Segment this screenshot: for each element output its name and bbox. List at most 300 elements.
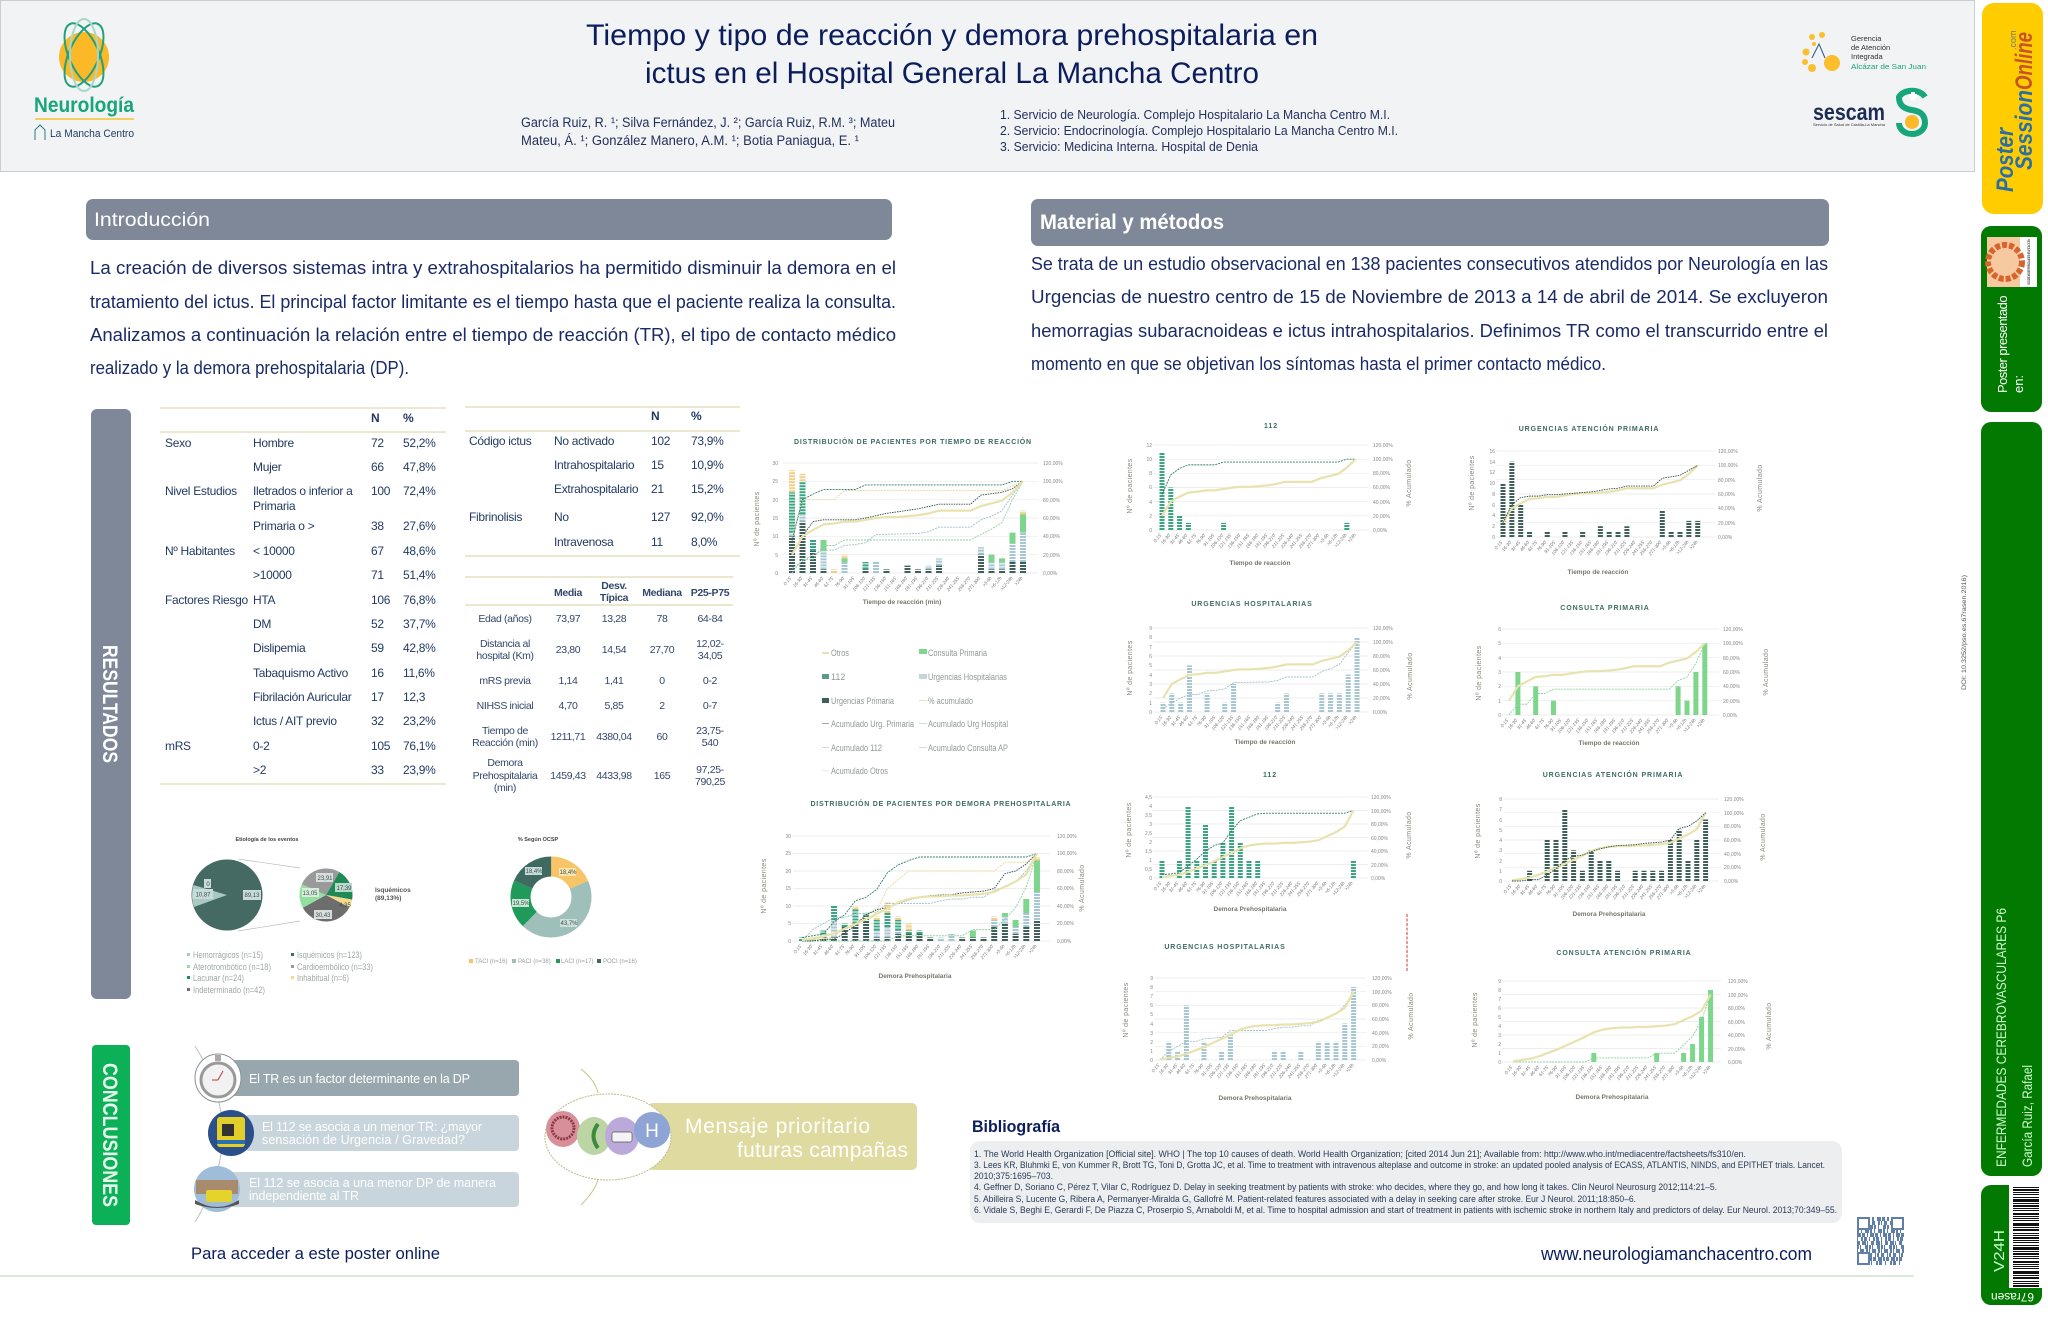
x labels: 226-240' xyxy=(1279,532,1295,550)
table: código ictus y fibrinolisis xyxy=(465,407,740,556)
y axis left: 0 xyxy=(775,571,778,577)
x labels: 256-270' xyxy=(969,943,985,961)
y axis left: 3 xyxy=(1149,822,1152,828)
x labels: 256-270' xyxy=(1295,1062,1311,1080)
x labels: 106-120' xyxy=(1211,714,1226,731)
x labels: 136-150' xyxy=(1228,714,1243,731)
x labels: 91-105' xyxy=(1202,532,1216,547)
x labels: >5-6h xyxy=(981,575,993,588)
table: características demográficas: Fibrilación Auricular xyxy=(253,690,352,704)
x labels: 106-120' xyxy=(1208,1062,1223,1079)
x labels: 166-180' xyxy=(905,943,920,960)
x labels: 166-180' xyxy=(1595,883,1610,900)
x labels: 91-105' xyxy=(842,575,856,590)
donut xyxy=(520,866,582,928)
table: variables cuantitativas: 0-2 xyxy=(703,675,718,687)
x labels: 61-75' xyxy=(1187,714,1199,727)
x labels: 136-150' xyxy=(1227,532,1242,549)
panel: references: 2010;375:1695–703. xyxy=(974,1171,1053,1181)
sidebar: code and barcode xyxy=(1981,1185,2042,1305)
pie: subtipos isquémicos xyxy=(300,868,353,921)
table: variables cuantitativas: 790,25 xyxy=(695,776,726,788)
y axis right: 120,00% xyxy=(1728,979,1748,985)
x labels: 196-210' xyxy=(1604,539,1619,556)
x labels: 0-15' xyxy=(1502,883,1513,894)
x labels: >6-12h xyxy=(1675,717,1688,732)
icon: hospital: H xyxy=(645,1121,659,1142)
y axis right: 120,00% xyxy=(1373,443,1393,449)
x labels: 196-210' xyxy=(1612,883,1627,900)
y axis left: 3 xyxy=(1149,682,1152,688)
x labels: 16-30' xyxy=(1501,539,1513,552)
x labels: 106-120' xyxy=(1557,717,1572,734)
y axis right: 120,00% xyxy=(1371,795,1391,801)
sidebar: PosterSessionOnline tab xyxy=(1982,3,2043,214)
x labels: >12-24h xyxy=(1682,717,1697,734)
y axis right xyxy=(1371,795,1391,882)
y axis left: 5 xyxy=(1498,1015,1501,1021)
axis title: % acumulado: % Acumulado xyxy=(1757,464,1764,512)
x labels: 166-180' xyxy=(1598,1064,1613,1081)
x labels: 91-105' xyxy=(1549,717,1563,732)
x labels: 61-75' xyxy=(1536,883,1548,896)
y axis right: 60,00% xyxy=(1723,670,1741,676)
y axis right: 60,00% xyxy=(1372,1017,1390,1023)
chart title: DISTRIBUCIÓN DE PACIENTES POR TIEMPO DE REACCIÓN xyxy=(794,437,1032,446)
table: variables cuantitativas: Reacción (min) xyxy=(472,737,538,749)
table: variables cuantitativas: mRS previa xyxy=(479,675,531,687)
x labels: >24h xyxy=(1344,1062,1355,1074)
chart title: CONSULTA ATENCIÓN PRIMARIA xyxy=(1556,948,1692,957)
x labels: 256-270' xyxy=(1638,539,1654,557)
heading: Material y métodos xyxy=(1031,199,1829,246)
legend: Isquémicos (n=123) xyxy=(297,950,362,960)
legend xyxy=(187,950,373,995)
legend: Indeterminado (n=42) xyxy=(193,985,265,995)
x labels: 31-45' xyxy=(1519,883,1531,896)
chart title: DISTRIBUCIÓN DE PACIENTES POR DEMORA PREHOSPITALARIA xyxy=(810,799,1072,808)
panel: references: 1. The World Health Organization [Official site]. WHO | The top 10 causes of death. World Health Organization; [cited 2014 Jun 21]; Available from: http://www.who.int/mediacentre/factsheets/fs310/en. xyxy=(974,1149,1746,1159)
x labels: 31-45' xyxy=(802,575,814,588)
sidebar: PosterSessionOnline tab: Session xyxy=(2011,90,2038,170)
y axis right: 40,00% xyxy=(1371,849,1389,855)
chart: % según OCSP xyxy=(469,837,637,965)
table: código ictus y fibrinolisis: Extrahospitalario xyxy=(554,482,639,496)
y axis right xyxy=(1718,449,1738,541)
x labels: 0-15' xyxy=(1499,717,1510,728)
axis title: % acumulado: % Acumulado xyxy=(1406,811,1413,859)
y axis right: 20,00% xyxy=(1723,699,1741,705)
x labels: 31-45' xyxy=(812,943,824,956)
x labels: >12-24h xyxy=(1331,880,1346,897)
donut labels: 18,4% xyxy=(559,870,577,876)
table: características demográficas: 23,9% xyxy=(403,763,436,777)
x labels: 196-210' xyxy=(1264,714,1279,731)
y axis left: 10 xyxy=(1146,457,1152,463)
table: características demográficas: 27,6% xyxy=(403,519,436,533)
x labels: 0-15' xyxy=(792,943,803,954)
chart: urgencias hospitalarias, tiempo de reacción xyxy=(1127,601,1414,746)
logo: sescam: Servicio de Salud de Castilla-La Mancha xyxy=(1813,123,1885,127)
x labels: >6-12h xyxy=(1324,1062,1337,1077)
table: características demográficas: >10000 xyxy=(253,568,292,582)
icon: ambulance van xyxy=(605,1117,639,1155)
x labels: 46-60' xyxy=(1519,539,1531,552)
x labels: >6-12h xyxy=(1681,1064,1694,1079)
panel: references: 5. Abilleira S, Lucente G, Ribera A, Permanyer-Miralda G, Gallofré M. Patient-related features associated with a delay in seeking care after stroke. Eur J Neurol. 2011;18:850–6. xyxy=(974,1194,1636,1204)
authors: García Ruiz, R. ¹; Silva Fernández, J. ²; García Ruiz, R.M. ³; Mateu xyxy=(521,115,895,130)
y axis left: 4 xyxy=(1150,1022,1153,1028)
x labels: >12-24h xyxy=(999,575,1014,592)
x labels: 136-150' xyxy=(873,575,888,592)
x labels: 211-225' xyxy=(1268,1062,1284,1080)
title: ictus en el Hospital General La Mancha Centro xyxy=(645,57,1259,90)
y axis right: 20,00% xyxy=(1718,521,1736,527)
x labels: 226-240' xyxy=(1633,1064,1649,1082)
legend: gráficos de distribución: Urgencias Hospitalarias xyxy=(928,672,1007,682)
x labels: 31-45' xyxy=(1510,539,1522,552)
icon: QR code xyxy=(1857,1218,1904,1264)
x labels: 166-180' xyxy=(1586,539,1601,556)
y axis right: 20,00% xyxy=(1724,865,1742,871)
table: código ictus y fibrinolisis: No activado xyxy=(554,434,615,448)
table: variables cuantitativas: 1459,43 xyxy=(550,770,586,782)
x labels: 196-210' xyxy=(1261,880,1276,897)
y axis left: 2 xyxy=(1150,1040,1153,1046)
table: características demográficas: Dislipemia xyxy=(253,641,306,655)
table: variables cuantitativas: 4433,98 xyxy=(596,770,632,782)
x labels: >6-12h xyxy=(990,575,1003,590)
bars xyxy=(1503,462,1698,537)
table: variables cuantitativas: 12,02- xyxy=(696,638,725,650)
y axis right: 60,00% xyxy=(1371,836,1389,842)
logo: Gerencia de Atención Integrada: Integrada xyxy=(1851,52,1884,61)
y axis right: 40,00% xyxy=(1372,1031,1390,1037)
label: isquémicos xyxy=(375,887,411,902)
y axis left: 0 xyxy=(1498,713,1501,719)
logo: sescam xyxy=(1813,91,1925,134)
stacked bars xyxy=(802,857,1037,941)
x labels xyxy=(1493,539,1699,557)
x labels: 46-60' xyxy=(1178,714,1190,727)
pie: subtipos isquémicos: 13,05 xyxy=(302,891,318,897)
x labels: 226-240' xyxy=(1278,880,1294,898)
icon: stopwatch xyxy=(195,1054,241,1102)
x labels: 106-120' xyxy=(1209,880,1224,897)
x labels: 31-45' xyxy=(1168,880,1180,893)
icon: ambulance xyxy=(208,1110,254,1156)
text: introducción: tratamiento del ictus. El principal factor limitante es el tiempo hasta que el paciente realiza la consulta. xyxy=(90,292,896,312)
title xyxy=(586,19,1318,90)
y axis right: 0,00% xyxy=(1057,939,1072,945)
pie: subtipos isquémicos: 30,43 xyxy=(315,913,331,919)
x labels: 61-75' xyxy=(1527,539,1539,552)
callout text: Mensaje prioritario xyxy=(685,1115,870,1138)
text: material y métodos xyxy=(1031,254,1828,374)
y axis left xyxy=(1498,627,1501,719)
legend: Cardioembólico (n=33) xyxy=(297,962,373,972)
conclusion 2: El 112 se asocia a un menor TR: ¿mayor xyxy=(262,1120,482,1134)
x labels: 76-90' xyxy=(1536,539,1548,552)
x labels: >24h xyxy=(1013,575,1024,587)
table: características demográficas: Primaria o > xyxy=(253,519,315,533)
y axis right: 60,00% xyxy=(1728,1020,1746,1026)
y axis left xyxy=(1145,795,1152,882)
panel: references: 6. Vidale S, Beghi E, Gerardi F, De Piazza C, Proserpio S, Arnaboldi M, et al. Time to hospital admission and start of treatment in patients with ischemic stroke in northern Italy and predictors of delay. Eur Neurol. 2013;70:349–55. xyxy=(974,1205,1837,1215)
x labels: 211-225' xyxy=(936,943,952,961)
table: variables cuantitativas: 34,05 xyxy=(698,650,723,662)
icon: phone xyxy=(577,1117,611,1155)
y axis right: 0,00% xyxy=(1373,710,1388,716)
table: características demográficas: 48,6% xyxy=(403,544,436,558)
axis title: % acumulado: % Acumulado xyxy=(1408,992,1415,1040)
y axis left: 3 xyxy=(1150,1031,1153,1037)
logo: Gerencia de Atención Integrada xyxy=(1802,32,1926,72)
x labels: 226-240' xyxy=(935,575,951,593)
x labels: 271-300' xyxy=(1654,717,1670,735)
table: características demográficas: Hombre xyxy=(253,436,295,450)
table: variables cuantitativas: 73,97 xyxy=(556,613,581,625)
logo: Neurología La Mancha Centro xyxy=(34,18,134,140)
x labels: 121-135' xyxy=(1571,1064,1586,1081)
x labels: 121-135' xyxy=(862,575,877,592)
x labels: 76-90' xyxy=(1547,1064,1559,1077)
logo: sescam: sescam xyxy=(1813,99,1885,125)
table: variables cuantitativas: 0-7 xyxy=(703,700,718,712)
table: características demográficas: 16 xyxy=(371,666,384,680)
x labels: >5-6h xyxy=(1668,883,1680,896)
y axis left: 10 xyxy=(1489,481,1495,487)
x labels: 256-270' xyxy=(1298,714,1314,732)
y axis right: 120,00% xyxy=(1057,834,1077,840)
chart: distribución por demora prehospitalaria xyxy=(761,799,1086,980)
y axis left: 5 xyxy=(1499,828,1502,834)
table: código ictus y fibrinolisis: 15 xyxy=(651,458,664,472)
table: variables cuantitativas: Media xyxy=(554,587,583,599)
x labels: 241-255' xyxy=(1636,717,1652,735)
x labels: >24h xyxy=(1688,539,1699,551)
y axis left: 3 xyxy=(1498,1033,1501,1039)
y axis left: 6 xyxy=(1498,627,1501,633)
x labels: 256-270' xyxy=(1651,1064,1667,1082)
x labels: 91-105' xyxy=(853,943,867,958)
chart title: 112 xyxy=(1263,772,1277,779)
table: características demográficas: 52,2% xyxy=(403,436,436,450)
y axis left: 8 xyxy=(1492,492,1495,498)
table: características demográficas: 37,7% xyxy=(403,617,436,631)
table: características demográficas: 76,1% xyxy=(403,739,436,753)
sidebar: PosterSessionOnline tab: Poster xyxy=(1992,127,2019,192)
table: código ictus y fibrinolisis: Código ictus xyxy=(469,434,532,448)
table: variables cuantitativas: 23,75- xyxy=(696,725,725,737)
y axis left: 1 xyxy=(1149,858,1152,864)
table: características demográficas: 33 xyxy=(371,763,384,777)
conclusions list xyxy=(194,1046,519,1222)
y axis right: 60,00% xyxy=(1373,668,1391,674)
logo: Gerencia de Atención Integrada: de Atención xyxy=(1851,43,1890,52)
x labels: >12-24h xyxy=(1012,943,1027,960)
x labels: >12-24h xyxy=(1334,714,1349,731)
callout text xyxy=(685,1115,908,1162)
legend: Hemorrágicos (n=15) xyxy=(193,950,263,960)
x labels xyxy=(782,575,1024,593)
x labels: 121-135' xyxy=(1568,883,1583,900)
x labels: 211-225' xyxy=(1269,880,1285,898)
chart: urgencias atención primaria, tiempo de reacción xyxy=(1469,424,1764,576)
y axis left: 12 xyxy=(1489,470,1495,476)
y axis right: 100,00% xyxy=(1724,811,1744,817)
x labels xyxy=(1153,714,1358,732)
x labels: 181-195' xyxy=(1604,883,1619,900)
x labels: 166-180' xyxy=(894,575,909,592)
table: código ictus y fibrinolisis: 15,2% xyxy=(691,482,724,496)
legend: Inhabitual (n=6) xyxy=(297,973,349,983)
y axis left: 7 xyxy=(1499,807,1502,813)
table: características demográficas: 47,8% xyxy=(403,460,436,474)
x labels: 271-300' xyxy=(1647,539,1663,557)
x labels: 211-225' xyxy=(924,575,940,593)
y axis left: 16 xyxy=(1489,449,1495,455)
y axis left: 9 xyxy=(1149,626,1152,632)
x labels: 136-150' xyxy=(1569,539,1584,556)
x labels: 271-300' xyxy=(979,943,995,961)
text: material y métodos: Se trata de un estudio observacional en 138 pacientes consecutivos atendidos por Neurología en las xyxy=(1031,254,1828,274)
y axis right: 80,00% xyxy=(1372,1003,1390,1009)
y axis left: 2,5 xyxy=(1145,831,1152,837)
axis title: tiempo: Tiempo de reacción xyxy=(1230,560,1290,567)
y axis left: 14 xyxy=(1489,460,1495,466)
x labels: >24h xyxy=(1701,1064,1712,1076)
x labels: 181-195' xyxy=(1602,717,1617,734)
x labels: >5-6h xyxy=(1660,539,1672,552)
x labels: 0-15' xyxy=(1150,1062,1161,1073)
x labels: >12-24h xyxy=(1683,883,1698,900)
y axis left xyxy=(1150,976,1153,1064)
y axis left xyxy=(1499,797,1502,885)
conclusion 2: sensación de Urgencia / Gravedad? xyxy=(262,1133,465,1147)
x labels: 76-90' xyxy=(844,943,856,956)
table: código ictus y fibrinolisis: N xyxy=(651,409,659,423)
axis title: % acumulado: % Acumulado xyxy=(1407,652,1414,700)
red dashed marker xyxy=(1406,914,1408,971)
x labels: 256-270' xyxy=(1647,883,1663,901)
x labels: 31-45' xyxy=(1520,1064,1532,1077)
chart: urgencias atención primaria, demora prehospitalaria xyxy=(1475,770,1767,918)
table: variables cuantitativas: Edad (años) xyxy=(478,613,532,625)
table: variables cuantitativas: 13,28 xyxy=(602,613,627,625)
chart title: URGENCIAS ATENCIÓN PRIMARIA xyxy=(1519,424,1659,433)
table: código ictus y fibrinolisis: 73,9% xyxy=(691,434,724,448)
table: variables cuantitativas: 97,25- xyxy=(696,764,725,776)
y axis left: 3 xyxy=(1498,670,1501,676)
table: características demográficas: 51,4% xyxy=(403,568,436,582)
x labels: >24h xyxy=(1695,717,1706,729)
y axis right: 80,00% xyxy=(1723,656,1741,662)
table: variables cuantitativas: Mediana xyxy=(642,587,682,599)
x labels: >12-24h xyxy=(1331,1062,1346,1079)
table: variables cuantitativas: 14,54 xyxy=(602,644,627,656)
x labels: 136-150' xyxy=(1580,1064,1595,1081)
icon: ambulance at hospital xyxy=(194,1166,240,1212)
cumulative lines xyxy=(1513,994,1711,1062)
x labels: 106-120' xyxy=(1562,1064,1577,1081)
x labels: 121-135' xyxy=(1218,880,1233,897)
x labels: 106-120' xyxy=(1551,539,1566,556)
y axis left: 2 xyxy=(1499,859,1502,865)
table: características demográficas: 72,4% xyxy=(403,484,436,498)
x labels: 256-270' xyxy=(1645,717,1661,735)
x labels: 211-225' xyxy=(1271,714,1287,732)
x labels: 241-255' xyxy=(1286,880,1302,898)
y axis left: 0 xyxy=(1149,876,1152,882)
DOI: DOI: 10.3252/pso.es.67rasen.2016) xyxy=(1961,575,1968,690)
y axis right: 0,00% xyxy=(1372,1058,1387,1064)
pie: subtipos isquémicos: 17,39 xyxy=(336,886,352,892)
x labels: 166-180' xyxy=(1245,532,1260,549)
x labels: 211-225' xyxy=(1620,883,1636,901)
axis title: demora: Demora Prehospitalaria xyxy=(1576,1094,1649,1101)
table: características demográficas: Primaria xyxy=(253,499,296,513)
chart: consulta primaria, tiempo de reacción xyxy=(1476,605,1770,747)
table: código ictus y fibrinolisis: 21 xyxy=(651,482,664,496)
x labels: 256-270' xyxy=(1297,532,1313,550)
y axis right: 20,00% xyxy=(1728,1047,1746,1053)
x labels: 166-180' xyxy=(1244,880,1259,897)
y axis left: 4 xyxy=(1498,656,1501,662)
y axis right xyxy=(1373,626,1393,716)
y axis right xyxy=(1372,976,1392,1064)
y axis left: 4 xyxy=(1499,838,1502,844)
x labels: 16-30' xyxy=(1511,1064,1523,1077)
table: código ictus y fibrinolisis: Fibrinolisis xyxy=(469,510,522,524)
y axis left: 2 xyxy=(1149,691,1152,697)
x labels: 106-120' xyxy=(863,943,878,960)
pie: subtipos isquémicos: 4,35 xyxy=(339,903,351,909)
chart: 112, tiempo de reacción xyxy=(1127,423,1413,567)
sidebar: session and author: García Ruiz, Rafael xyxy=(2019,1065,2035,1167)
x labels: 181-195' xyxy=(904,575,919,592)
sidebar: Poster presentado en: en: xyxy=(2011,375,2026,393)
cumulative lines xyxy=(802,854,1037,941)
icon: hospital xyxy=(634,1112,670,1148)
x labels: 61-75' xyxy=(1184,1062,1196,1075)
y axis left: 6 xyxy=(1149,654,1152,660)
y axis left: 8 xyxy=(1149,635,1152,641)
bars xyxy=(1163,637,1357,712)
table: características demográficas: 71 xyxy=(371,568,384,582)
x labels: 196-210' xyxy=(1616,1064,1631,1081)
x labels: 241-255' xyxy=(1289,714,1305,732)
panel: references: 4. Geffner D, Soriano C, Pérez T, Vilar C, Rodríguez D. Delay in seeking treatment by patients with stroke: who decides, where they go, and how long it takes. Clin Neurol Neurosurg 2012;114:21–5. xyxy=(974,1182,1717,1192)
sidebar: Poster presentado en: SOCIEDAD ESPAÑOLA DE NEUROLOGÍA xyxy=(2026,238,2031,285)
x labels: 31-45' xyxy=(1167,1062,1179,1075)
x labels: 241-255' xyxy=(1630,539,1646,557)
x labels: 91-105' xyxy=(1552,883,1566,898)
pie: hemorrágicos e isquémicos: 10,87 xyxy=(195,892,211,898)
y axis right: 60,00% xyxy=(1057,886,1075,892)
x labels: 226-240' xyxy=(1621,539,1637,557)
x labels: >24h xyxy=(1347,714,1358,726)
cumulative lines xyxy=(1160,992,1354,1060)
donut legend: PACI (n=38) xyxy=(518,959,551,965)
x labels: >24h xyxy=(1027,943,1038,955)
authors xyxy=(521,115,895,148)
x labels: >12-24h xyxy=(1675,539,1690,556)
donut legend: TACI (n=16) xyxy=(475,959,507,965)
x labels: 0-15' xyxy=(782,575,793,586)
chart title: Etiología de los eventos xyxy=(236,837,298,843)
table: características demográficas: Iletrados o inferior a xyxy=(253,484,353,498)
